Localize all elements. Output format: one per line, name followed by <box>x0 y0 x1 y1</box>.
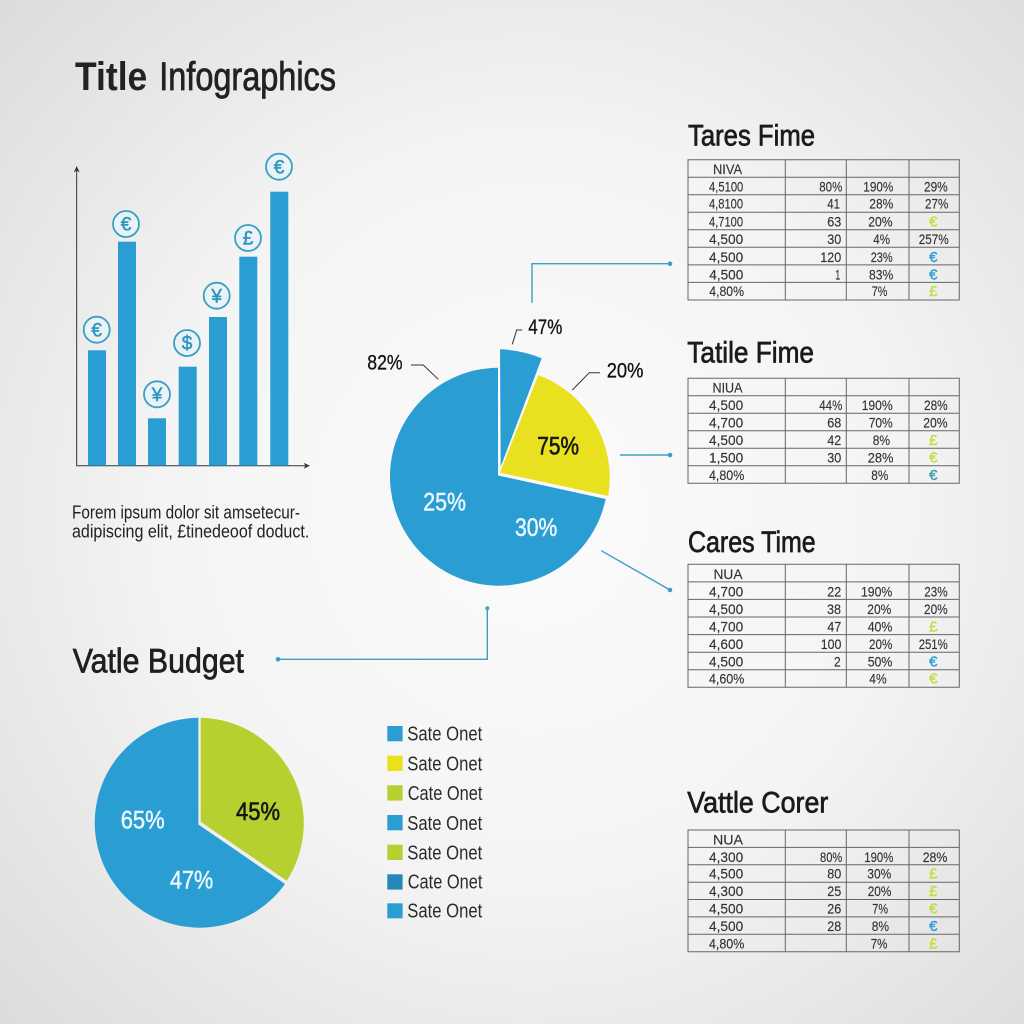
legend <box>387 724 483 922</box>
chart axes <box>74 166 310 469</box>
table: Tares Fime: 41 <box>827 196 840 212</box>
table: Cares Time <box>688 564 959 688</box>
slice label 45%: 45% <box>236 798 280 826</box>
table: Tares Fime: £ <box>929 283 938 300</box>
table: Cares Time: € <box>929 671 938 688</box>
connector: pie to third table <box>601 551 672 592</box>
table: Cares Time: 23% <box>924 584 948 600</box>
currency icons: € <box>91 320 102 341</box>
table: Tatile Fime: 28% <box>924 397 948 413</box>
callout 20%: 20% <box>607 360 643 383</box>
table: Cares Time: 4,60% <box>709 671 744 687</box>
callout 82%: 82% <box>367 351 403 374</box>
currency icons: € <box>274 157 285 178</box>
descriptive text block <box>72 502 309 541</box>
table: Vattle Corer: 4,500 <box>709 901 743 917</box>
slice label 65%: 65% <box>121 806 165 834</box>
title <box>75 55 336 99</box>
table: Cares Time: 190% <box>861 584 892 600</box>
table: Vattle Corer: 25 <box>827 883 841 899</box>
table: Tatile Fime: 44% <box>819 397 842 413</box>
table: Vattle Corer: NUA <box>713 831 744 847</box>
descriptive text block: Forem ipsum dolor sit amsetecur- <box>72 502 300 522</box>
table: Cares Time: 251% <box>919 636 948 652</box>
currency icons: € <box>121 215 132 236</box>
table: Cares Time: € <box>929 654 938 671</box>
slice label 30%: 30% <box>515 514 557 542</box>
table: Tatile Fime: 190% <box>862 397 893 413</box>
table: Vattle Corer: 7% <box>872 901 888 917</box>
table: Vattle Corer: 80 <box>827 866 841 882</box>
table: Cares Time: 20% <box>867 601 891 617</box>
table: Vattle Corer: 8% <box>872 918 889 934</box>
heading: Tares Fime: Tares Fime <box>688 120 815 153</box>
table: Tares Fime: 28% <box>869 196 893 212</box>
slice: yellow <box>500 375 610 496</box>
table: Tares Fime: 4,7100 <box>709 213 743 229</box>
legend: Sate Onet <box>407 813 483 835</box>
title: Infographics <box>159 55 336 99</box>
table: Vattle Corer: 4,300 <box>709 883 743 899</box>
table: Vattle Corer: 30% <box>867 866 891 882</box>
connector: pie to first table <box>532 261 672 303</box>
callout 47%: 47% <box>528 316 562 339</box>
table: Vattle Corer: 190% <box>864 849 893 865</box>
table: Cares Time: 22 <box>827 584 841 600</box>
table: Cares Time: 2 <box>834 654 841 670</box>
slice label 75%: 75% <box>537 432 579 460</box>
connector: budget heading to pie <box>276 606 489 662</box>
currency icons: ¥ <box>210 286 222 307</box>
table: Cares Time: £ <box>929 618 938 635</box>
budget pie chart <box>95 718 304 928</box>
legend: Cate Onet <box>408 783 483 805</box>
table: Vattle Corer: 28 <box>827 918 841 934</box>
table: Vattle Corer: 4,500 <box>709 918 743 934</box>
table: Tares Fime: 4,500 <box>709 266 743 282</box>
slice: lime <box>201 718 304 881</box>
table: Cares Time: 20% <box>924 601 948 617</box>
table: Tares Fime: 4,80% <box>709 283 744 299</box>
table: Tatile Fime: 8% <box>873 432 890 448</box>
table: Tares Fime: 257% <box>919 231 949 247</box>
descriptive text block: adipiscing elit, £tinedeoof doduct. <box>72 521 309 541</box>
table: Cares Time: 20% <box>869 636 892 652</box>
table: Cares Time: 100 <box>821 636 842 652</box>
table: Tatile Fime: 4,500 <box>709 397 743 413</box>
table: Cares Time: 40% <box>868 618 892 634</box>
table: Cares Time: 47 <box>827 618 841 634</box>
legend: Sate Onet <box>407 754 483 776</box>
table: Tatile Fime: 42 <box>827 432 841 448</box>
table: Tatile Fime: 30 <box>827 450 841 466</box>
heading: Tatile Fime: Tatile Fime <box>687 337 814 370</box>
table: Tatile Fime: 4,80% <box>709 467 744 483</box>
table: Tares Fime: 4% <box>873 231 890 247</box>
table: Vattle Corer: 80% <box>820 849 842 865</box>
table: Vattle Corer: 4,80% <box>709 936 744 952</box>
table: Tares Fime: 23% <box>871 249 893 265</box>
slice label 47%: 47% <box>170 866 213 894</box>
table: Vattle Corer <box>688 830 959 953</box>
table: Tatile Fime: 8% <box>871 467 888 483</box>
callout 20% <box>572 360 643 390</box>
table: Vattle Corer: £ <box>929 936 938 953</box>
table: Tares Fime: 190% <box>863 178 893 194</box>
table: Tatile Fime: 68 <box>827 414 841 430</box>
legend: Sate Onet <box>407 724 483 746</box>
table: Tares Fime: 120 <box>820 249 841 265</box>
table: Tares Fime: 4,5100 <box>709 178 743 194</box>
main pie chart <box>367 316 643 586</box>
table: Tares Fime: 4,500 <box>709 231 743 247</box>
table: Tares Fime: € <box>929 213 938 230</box>
table: Vattle Corer: € <box>929 918 938 935</box>
table: Tares Fime: 7% <box>872 283 887 299</box>
table: Tares Fime: 30 <box>827 231 841 247</box>
table: Vattle Corer: 20% <box>868 883 891 899</box>
table: Tatile Fime: 4,500 <box>709 432 743 448</box>
table: Tatile Fime: 4,700 <box>709 414 743 430</box>
legend: Cate Onet <box>408 872 483 894</box>
table: Tares Fime <box>688 160 959 300</box>
currency icons: $ <box>182 334 193 355</box>
table: Tares Fime: 20% <box>868 213 893 229</box>
heading: Cares Time: Cares Time <box>688 526 816 559</box>
table: Tares Fime: NIVA <box>713 161 743 177</box>
legend: Sate Onet <box>407 900 483 922</box>
currency icons: £ <box>243 229 254 250</box>
title: Title <box>75 55 147 99</box>
bars <box>88 192 288 466</box>
table: Tares Fime: 29% <box>924 178 948 194</box>
table: Cares Time: 4% <box>869 671 887 687</box>
table: Tares Fime: 1 <box>835 266 840 282</box>
table: Tatile Fime: 28% <box>868 450 893 466</box>
currency icons: ¥ <box>151 385 163 406</box>
table: Cares Time: 4,600 <box>709 636 743 652</box>
table: Vattle Corer: 4,500 <box>709 866 743 882</box>
heading: Vattle Corer: Vattle Corer <box>687 787 828 820</box>
slice: blue <box>95 718 285 928</box>
connector: pie to second table <box>620 453 672 457</box>
table: Tatile Fime: € <box>929 467 938 484</box>
table: Cares Time: 38 <box>827 601 841 617</box>
table: Tatile Fime <box>688 378 959 484</box>
table: Vattle Corer: 26 <box>827 901 841 917</box>
table: Tatile Fime: NIUA <box>712 379 743 395</box>
legend: Sate Onet <box>407 842 483 864</box>
table: Vattle Corer: £ <box>929 883 938 900</box>
table: Cares Time: 4,500 <box>709 601 743 617</box>
table: Tatile Fime: 1,500 <box>709 450 743 466</box>
slice: large blue <box>390 368 606 586</box>
callout 82% <box>367 351 438 379</box>
table: Tares Fime: € <box>929 249 938 266</box>
currency icons <box>84 154 292 407</box>
heading: Vatle Budget: Vatle Budget <box>73 643 244 681</box>
table: Cares Time: 4,700 <box>709 584 743 600</box>
slice: exploded blue <box>500 349 542 467</box>
table: Tares Fime: 83% <box>869 266 893 282</box>
table: Cares Time: 4,700 <box>709 618 743 634</box>
callout 47% <box>512 316 562 344</box>
table: Cares Time: NUA <box>714 566 743 582</box>
table: Vattle Corer: € <box>929 901 938 918</box>
table: Cares Time: 50% <box>868 654 892 670</box>
table: Vattle Corer: 4,300 <box>709 849 743 865</box>
bar chart with currency icons <box>74 154 310 469</box>
table: Tares Fime: 4,500 <box>709 249 743 265</box>
table: Cares Time: 4,500 <box>709 654 743 670</box>
table: Tatile Fime: 70% <box>869 414 893 430</box>
table: Tares Fime: 63 <box>827 213 841 229</box>
table: Tares Fime: 4,8100 <box>709 196 743 212</box>
table: Vattle Corer: 7% <box>871 936 887 952</box>
table: Tares Fime: 27% <box>925 196 948 212</box>
table: Tatile Fime: € <box>929 450 938 467</box>
table: Tatile Fime: £ <box>929 432 938 449</box>
slice label 25%: 25% <box>423 489 466 517</box>
table: Vattle Corer: 28% <box>923 849 947 865</box>
table: Tares Fime: 80% <box>819 178 842 194</box>
table: Tatile Fime: 20% <box>923 414 948 430</box>
table: Tares Fime: € <box>929 266 938 283</box>
table: Vattle Corer: £ <box>929 866 938 883</box>
